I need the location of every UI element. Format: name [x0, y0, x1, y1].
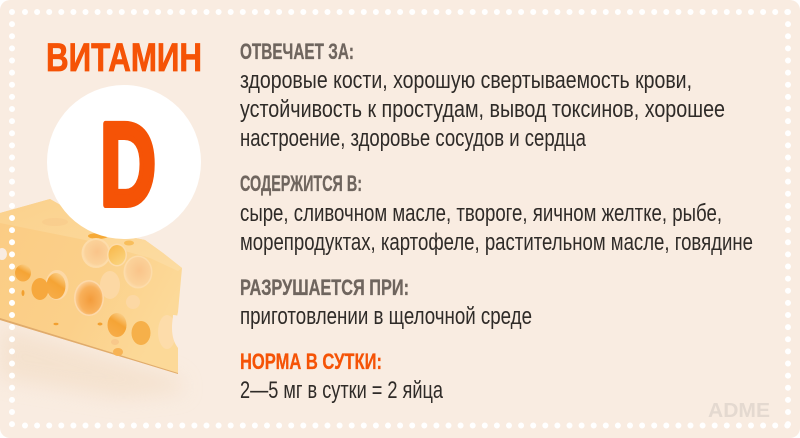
text block: responsible for: ОТВЕЧАЕТ ЗА: [240, 39, 354, 64]
text block: contained in [240, 171, 753, 256]
text block: responsible for [240, 39, 725, 152]
text block: contained in: СОДЕРЖИТСЯ В: [240, 171, 362, 196]
text block: destroyed by: приготовлении в щелочной среде [240, 303, 532, 330]
title: ВИТАМИН [46, 36, 202, 80]
text block: destroyed by [240, 275, 532, 330]
text block: destroyed by: РАЗРУШАЕТСЯ ПРИ: [240, 275, 409, 300]
cheese shadow [0, 325, 185, 398]
text block: daily norm: НОРМА В СУТКИ: [240, 349, 382, 374]
text block: daily norm [240, 349, 443, 404]
icon: white circle with letter D: D [100, 99, 156, 231]
text block: responsible for: здоровые кости, хорошую свертываемость крови, [240, 67, 692, 94]
illustration: cheese wedge [0, 199, 183, 374]
watermark: ADME [708, 400, 770, 422]
text block: daily norm: 2—5 мг в сутки = 2 яйца [240, 377, 443, 404]
icon: white circle with letter D [47, 85, 201, 239]
text block: responsible for: настроение, здоровье сосудов и сердца [240, 125, 586, 152]
